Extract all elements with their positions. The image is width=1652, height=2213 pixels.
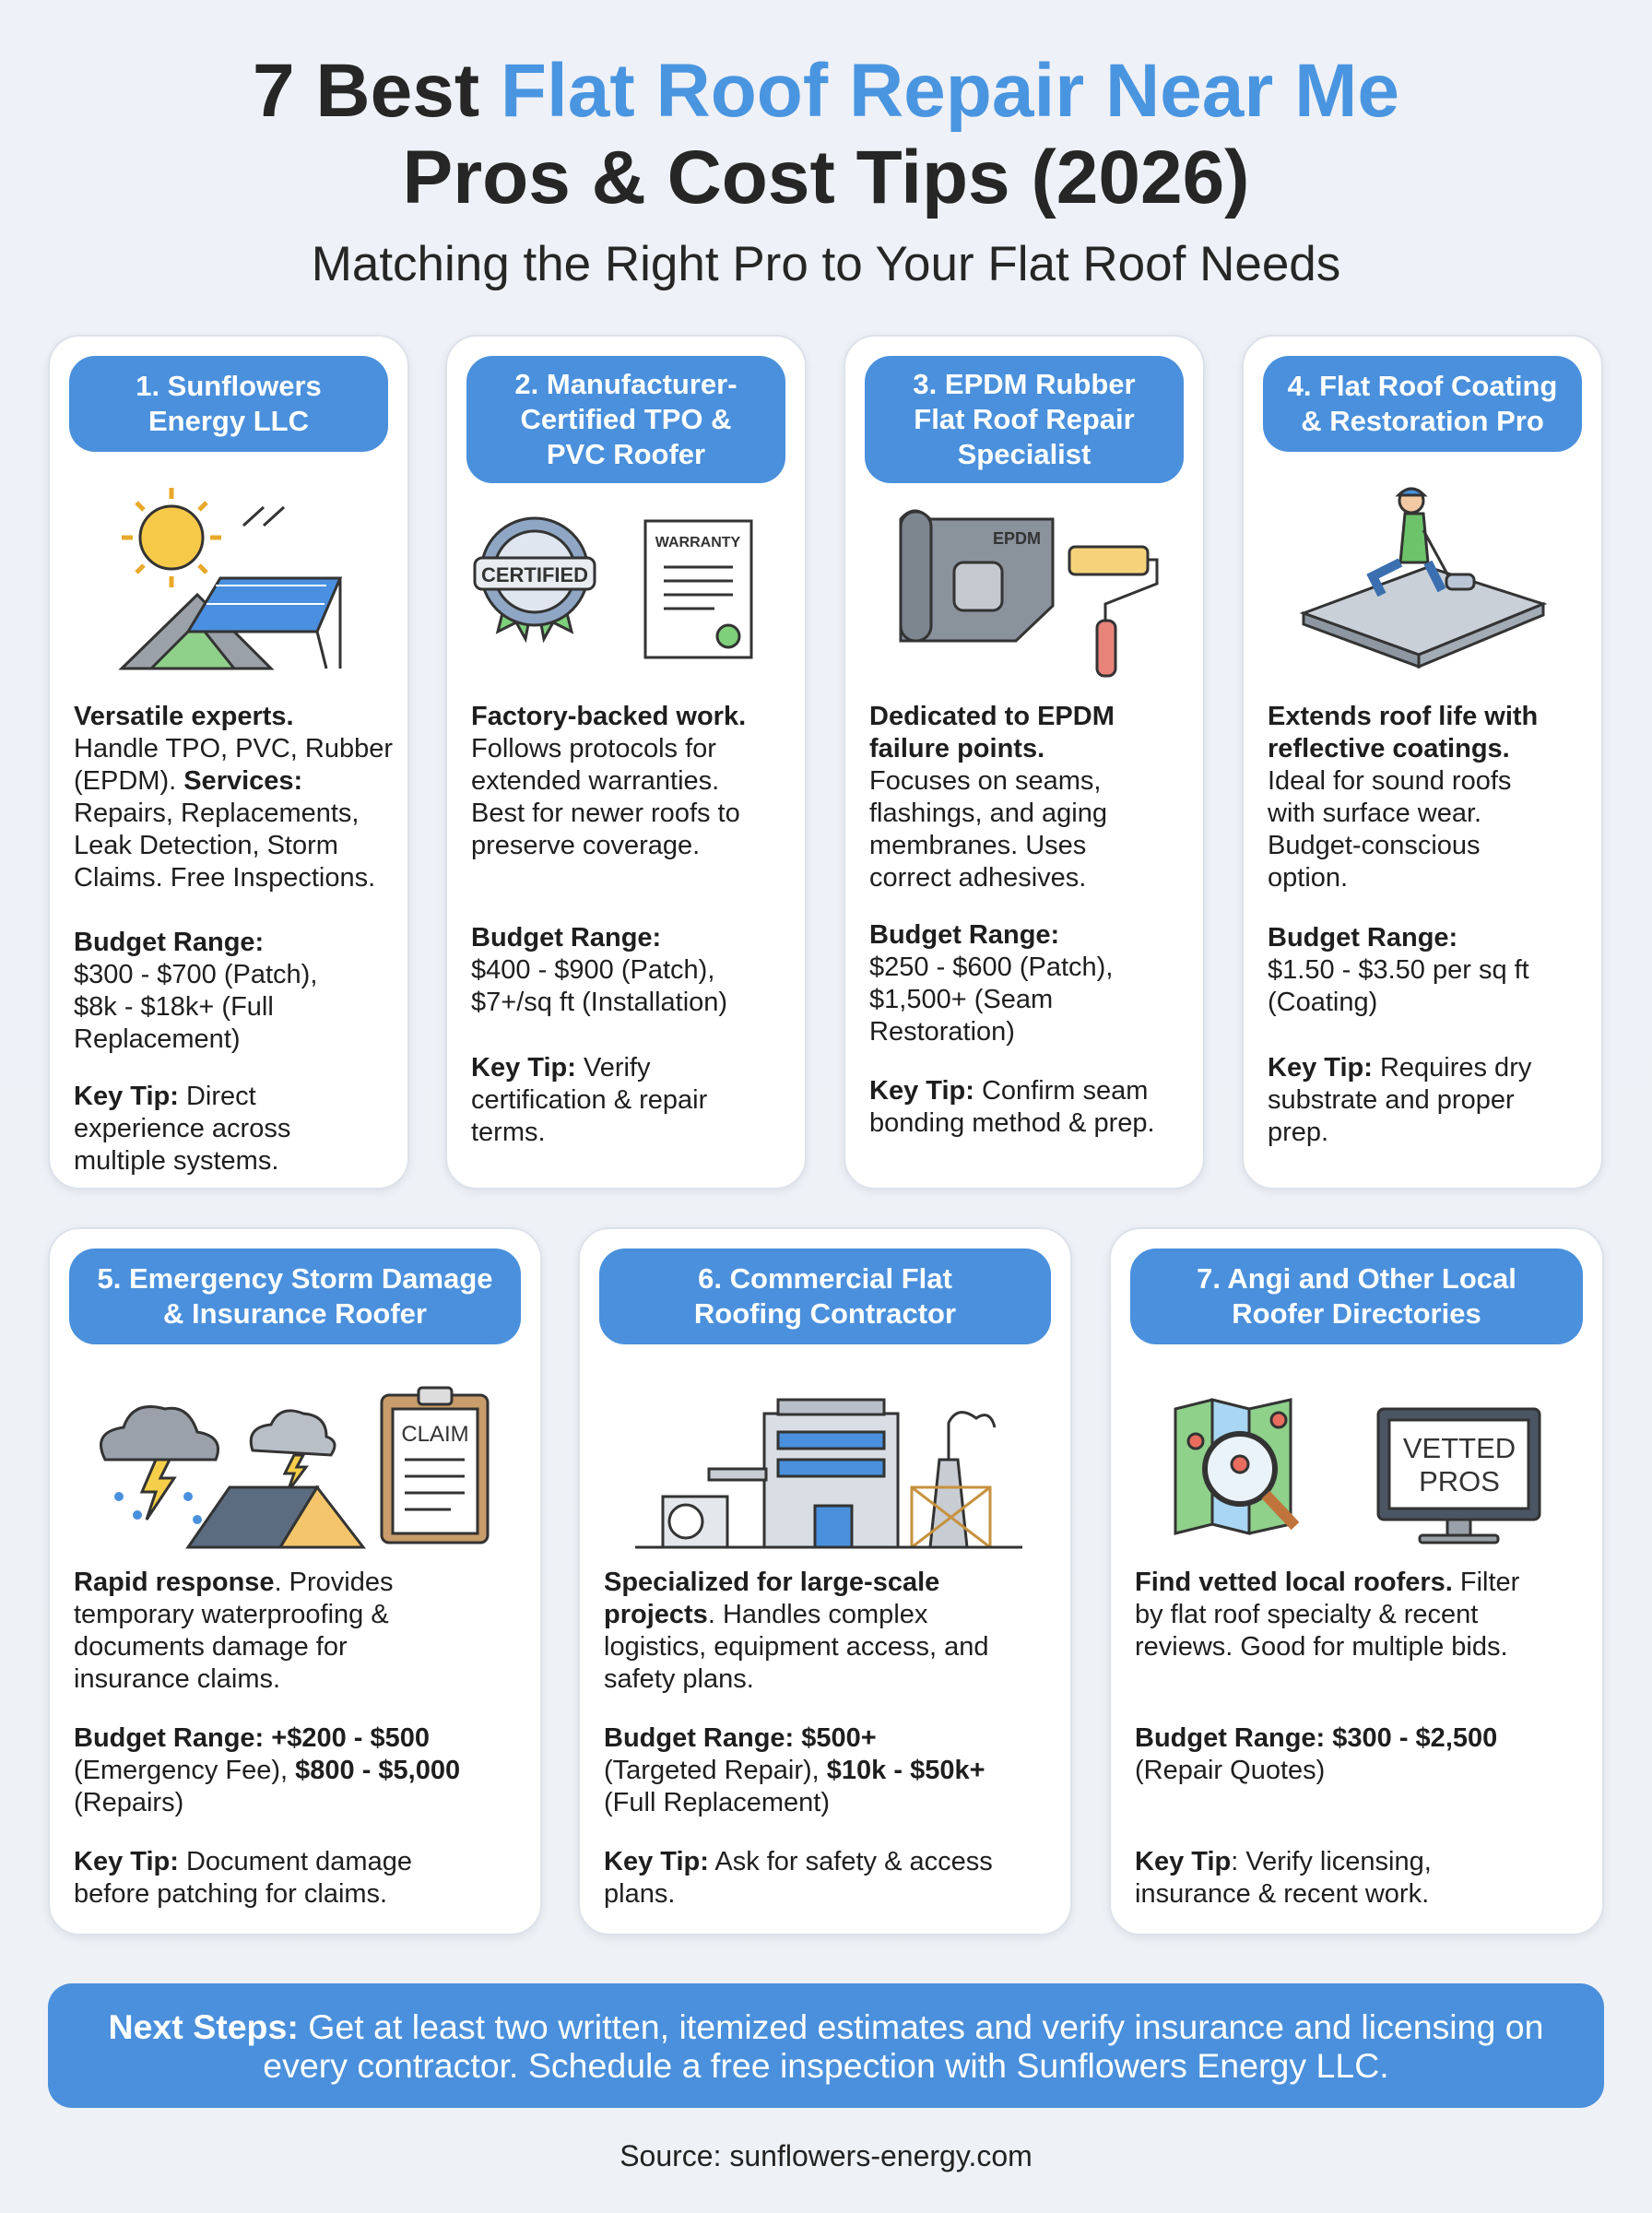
text: card 2 description: extended warranties. [471, 766, 719, 796]
text: card 5 description: insurance claims. [74, 1664, 280, 1694]
panel: card 7 [1109, 1227, 1604, 1935]
text: card 4 description: Budget-conscious [1268, 831, 1481, 860]
text: card 4 key tip: prep. [1268, 1118, 1328, 1147]
heading: card 2: Certified TPO & [520, 403, 732, 435]
title [253, 49, 1399, 219]
text: card 2 budget: Budget Range: [471, 923, 661, 953]
text: card 2 description: Best for newer roofs to [471, 799, 740, 828]
text: card 3 description: Focuses on seams, [869, 766, 1101, 796]
heading: card 2 [466, 356, 785, 483]
text: card 1 key tip [74, 1082, 290, 1176]
icon: certified badge and warranty [474, 516, 752, 658]
text: card 1 budget [74, 928, 317, 1054]
text: card 3 budget [869, 920, 1113, 1047]
panel: card 1 [48, 335, 409, 1189]
text: card 1 description [74, 702, 393, 893]
text: card 4 key tip: substrate and proper [1268, 1085, 1515, 1115]
text: card 4 budget: Budget Range: [1268, 923, 1457, 953]
text: card 4 description [1268, 702, 1538, 893]
heading: card 1: 1. Sunflowers [136, 370, 322, 402]
callout: next steps [48, 1983, 1604, 2108]
heading: card 4 [1263, 356, 1582, 452]
callout: next steps: Next Steps: Get at least two written, itemized estimates and verify insurance and licensing on [109, 2006, 1543, 2045]
text: card 2 description: preserve coverage. [471, 831, 700, 860]
heading: card 5: & Insurance Roofer [163, 1297, 427, 1330]
text: card 6 description: Specialized for large-scale [604, 1568, 939, 1597]
text: card 2 key tip: terms. [471, 1118, 546, 1147]
text: card 1 key tip: Key Tip: Direct [74, 1082, 256, 1111]
text: card 3 description [869, 702, 1115, 893]
text: card 1 key tip: multiple systems. [74, 1146, 278, 1176]
text: card 4 description: with surface wear. [1268, 799, 1481, 828]
source: Source: sunflowers-energy.com [620, 2139, 1032, 2172]
icon: EPDM membrane and roller: EPDM [993, 529, 1041, 548]
text: card 3 budget: Budget Range: [869, 920, 1059, 950]
text: card 4 key tip: Key Tip: Requires dry [1268, 1053, 1531, 1083]
heading: card 2: PVC Roofer [547, 438, 705, 470]
icon: map search and vetted pros monitor [1174, 1398, 1541, 1544]
text: card 2 budget [471, 923, 727, 1017]
text: card 6 description: logistics, equipment access, and [604, 1632, 988, 1662]
text: card 1 key tip: experience across [74, 1114, 290, 1143]
text: card 4 description: reflective coatings. [1268, 734, 1510, 763]
text: card 1 description: Versatile experts. [74, 702, 294, 731]
text: card 6 budget [604, 1723, 985, 1817]
text: card 1 budget: $300 - $700 (Patch), [74, 960, 317, 989]
heading: card 1: Energy LLC [148, 405, 309, 437]
panel: card 4 [1242, 335, 1603, 1189]
heading: card 2: 2. Manufacturer- [514, 368, 738, 400]
icon: sun and solar roof [118, 488, 343, 669]
text: card 5 key tip: Key Tip: Document damage [74, 1847, 412, 1876]
text: card 6 key tip: Key Tip: Ask for safety & access [604, 1847, 993, 1876]
text: card 6 description [604, 1568, 988, 1694]
text: card 4 budget: (Coating) [1268, 988, 1377, 1017]
text: card 2 description: Follows protocols for [471, 734, 716, 763]
heading: card 6: Roofing Contractor [694, 1297, 956, 1330]
text: card 3 key tip: Key Tip: Confirm seam [869, 1076, 1148, 1106]
text: card 7 budget: (Repair Quotes) [1135, 1756, 1325, 1785]
heading: card 3: Flat Roof Repair [914, 403, 1135, 435]
icon: certified badge and warranty: CERTIFIED [481, 563, 588, 586]
text: card 4 description: Ideal for sound roofs [1268, 766, 1511, 796]
text: card 5 budget: (Emergency Fee), $800 - $5,000 [74, 1756, 460, 1785]
icon: certified badge and warranty: WARRANTY [655, 535, 741, 550]
text: card 1 description: Handle TPO, PVC, Rubber [74, 734, 393, 763]
heading: card 3 [865, 356, 1184, 483]
heading: card 7 [1130, 1249, 1583, 1344]
panel: card 5 [48, 1227, 542, 1935]
heading: card 7: 7. Angi and Other Local [1197, 1262, 1516, 1295]
text: card 5 description: documents damage for [74, 1632, 348, 1662]
text: card 5 description [74, 1568, 394, 1694]
text: card 3 budget: Restoration) [869, 1017, 1015, 1047]
heading: card 1 [69, 356, 388, 452]
text: card 3 key tip: bonding method & prep. [869, 1108, 1155, 1138]
heading: card 5 [69, 1249, 521, 1344]
text: card 1 budget: Budget Range: [74, 928, 264, 957]
text: card 7 description: reviews. Good for multiple bids. [1135, 1632, 1508, 1662]
callout: next steps: every contractor. Schedule a free inspection with Sunflowers Energy LLC. [263, 2045, 1389, 2084]
text: card 3 description: correct adhesives. [869, 863, 1086, 893]
heading: card 6: 6. Commercial Flat [698, 1262, 952, 1295]
text: card 5 budget: (Repairs) [74, 1788, 183, 1817]
text: card 7 key tip [1135, 1847, 1432, 1909]
text: card 2 budget: $400 - $900 (Patch), [471, 955, 714, 985]
text: card 2 description: Factory-backed work. [471, 702, 746, 731]
icon: map search and vetted pros monitor: PROS [1419, 1465, 1500, 1497]
text: card 4 description: Extends roof life with [1268, 702, 1538, 731]
subtitle: Matching the Right Pro to Your Flat Roof Needs [312, 237, 1340, 291]
text: card 3 budget: $1,500+ (Seam [869, 985, 1053, 1014]
text: card 7 description [1135, 1568, 1519, 1662]
title: Pros & Cost Tips (2026) [402, 136, 1249, 219]
heading: card 5: 5. Emergency Storm Damage [97, 1262, 492, 1295]
text: card 3 budget: $250 - $600 (Patch), [869, 953, 1113, 982]
text: card 2 description [471, 702, 746, 860]
text: card 3 description: flashings, and aging [869, 799, 1107, 828]
icon: map search and vetted pros monitor: VETTED [1403, 1432, 1516, 1464]
panel: card 2 [445, 335, 807, 1189]
heading: card 4: 4. Flat Roof Coating [1288, 370, 1557, 402]
text: card 2 key tip [471, 1053, 707, 1147]
text: card 4 description: option. [1268, 863, 1348, 893]
text: card 3 description: Dedicated to EPDM [869, 702, 1115, 731]
text: card 6 budget: Budget Range: $500+ [604, 1723, 877, 1753]
icon: commercial building [635, 1398, 1022, 1549]
icon: worker coating roof [1300, 487, 1547, 669]
text: card 5 budget [74, 1723, 460, 1817]
text: card 3 description: failure points. [869, 734, 1044, 763]
text: card 5 key tip: before patching for claims. [74, 1879, 387, 1909]
icon: EPDM membrane and roller [900, 509, 1158, 677]
icon: storm clouds, damaged roof, claim: CLAIM [401, 1422, 469, 1447]
text: card 2 key tip: certification & repair [471, 1085, 707, 1115]
title: 7 Best Flat Roof Repair Near Me [253, 49, 1399, 133]
text: card 7 budget [1135, 1723, 1497, 1785]
heading: card 3: 3. EPDM Rubber [913, 368, 1136, 400]
text: card 6 description: projects. Handles complex [604, 1600, 927, 1629]
text: card 2 budget: $7+/sq ft (Installation) [471, 988, 727, 1017]
text: card 7 description: by flat roof specialty & recent [1135, 1600, 1478, 1629]
text: card 6 budget: (Full Replacement) [604, 1788, 830, 1817]
text: card 5 budget: Budget Range: +$200 - $500 [74, 1723, 430, 1753]
text: card 3 key tip [869, 1076, 1155, 1138]
text: card 3 description: membranes. Uses [869, 831, 1086, 860]
text: card 4 key tip [1268, 1053, 1532, 1147]
text: card 1 description: Repairs, Replacements, [74, 799, 359, 828]
heading: card 7: Roofer Directories [1232, 1297, 1481, 1330]
text: card 6 budget: (Targeted Repair), $10k - $50k+ [604, 1756, 985, 1785]
text: card 2 key tip: Key Tip: Verify [471, 1053, 650, 1083]
text: card 1 budget: Replacement) [74, 1024, 241, 1054]
text: card 1 description: (EPDM). Services: [74, 766, 302, 796]
text: card 7 key tip: insurance & recent work. [1135, 1879, 1429, 1909]
text: card 6 description: safety plans. [604, 1664, 754, 1694]
text: card 7 description: Find vetted local roofers. Filter [1135, 1568, 1519, 1597]
text: card 1 description: Claims. Free Inspections. [74, 863, 375, 893]
heading: card 6 [599, 1249, 1051, 1344]
text: card 4 budget [1268, 923, 1529, 1017]
text: card 5 description: Rapid response. Provides [74, 1568, 394, 1597]
panel: card 6 [578, 1227, 1072, 1935]
panel: card 3 [844, 335, 1205, 1189]
text: card 1 description: Leak Detection, Storm [74, 831, 338, 860]
text: card 5 description: temporary waterproofing & [74, 1600, 389, 1629]
text: card 6 key tip: plans. [604, 1879, 675, 1909]
text: card 7 key tip: Key Tip: Verify licensing, [1135, 1847, 1432, 1876]
text: card 1 budget: $8k - $18k+ (Full [74, 992, 274, 1022]
icon: storm clouds, damaged roof, claim [100, 1387, 489, 1549]
text: card 7 budget: Budget Range: $300 - $2,500 [1135, 1723, 1497, 1753]
text: card 6 key tip [604, 1847, 993, 1909]
text: card 5 key tip [74, 1847, 412, 1909]
heading: card 3: Specialist [958, 438, 1091, 470]
heading: card 4: & Restoration Pro [1301, 405, 1544, 437]
text: card 4 budget: $1.50 - $3.50 per sq ft [1268, 955, 1529, 985]
